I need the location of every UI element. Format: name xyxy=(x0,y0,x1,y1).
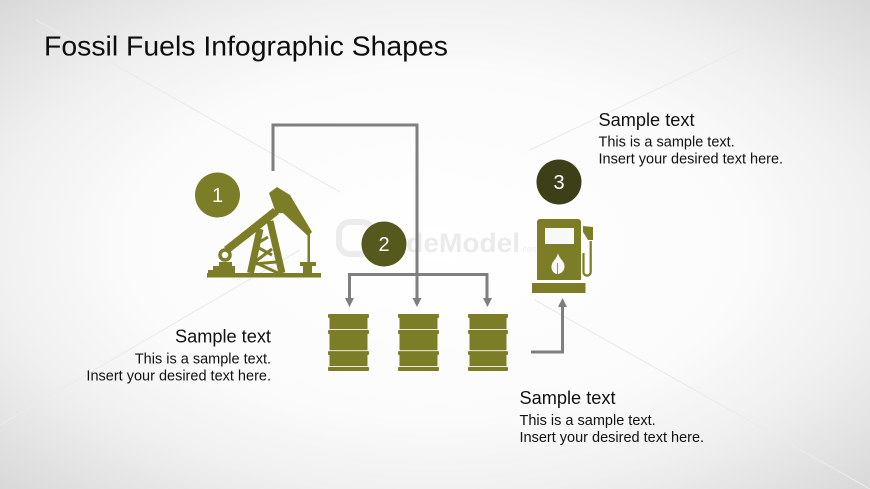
text block: step 2: Insert your desired text here. xyxy=(520,430,704,446)
text block: step 2: Sample text xyxy=(520,388,616,408)
text block: step 3: Insert your desired text here. xyxy=(598,152,783,168)
text block: step 1 xyxy=(86,326,271,384)
watermark xyxy=(339,222,540,258)
step 2 badge: 2 xyxy=(378,234,390,256)
text block: step 3: Sample text xyxy=(598,110,695,130)
step 1 badge xyxy=(195,172,240,218)
step 2 badge xyxy=(362,222,406,266)
connector: pumpjack to barrels xyxy=(273,125,422,307)
connector: barrels to pump xyxy=(531,298,567,352)
text block: step 1: This is a sample text. xyxy=(135,352,271,368)
text block: step 1: Sample text xyxy=(175,326,271,346)
step 3 badge: 3 xyxy=(553,172,565,194)
icon: oil barrels xyxy=(328,314,508,371)
step 3 badge xyxy=(536,160,582,204)
connector: barrel branches xyxy=(345,274,492,307)
step 1 badge: 1 xyxy=(212,185,223,207)
title: Fossil Fuels Infographic Shapes xyxy=(44,30,448,62)
text block: step 3 xyxy=(598,110,783,168)
barrel 2 xyxy=(398,314,439,371)
icon: fuel pump xyxy=(532,219,593,293)
barrel 3 xyxy=(468,314,508,371)
text block: step 2: This is a sample text. xyxy=(520,413,656,429)
barrel 1 xyxy=(328,314,369,371)
text block: step 1: Insert your desired text here. xyxy=(86,368,271,384)
watermark: SlideModel xyxy=(372,228,520,258)
icon: oil pumpjack xyxy=(207,187,321,278)
watermark: .com xyxy=(520,244,540,254)
text block: step 2 xyxy=(520,388,704,446)
text block: step 3: This is a sample text. xyxy=(598,134,735,150)
